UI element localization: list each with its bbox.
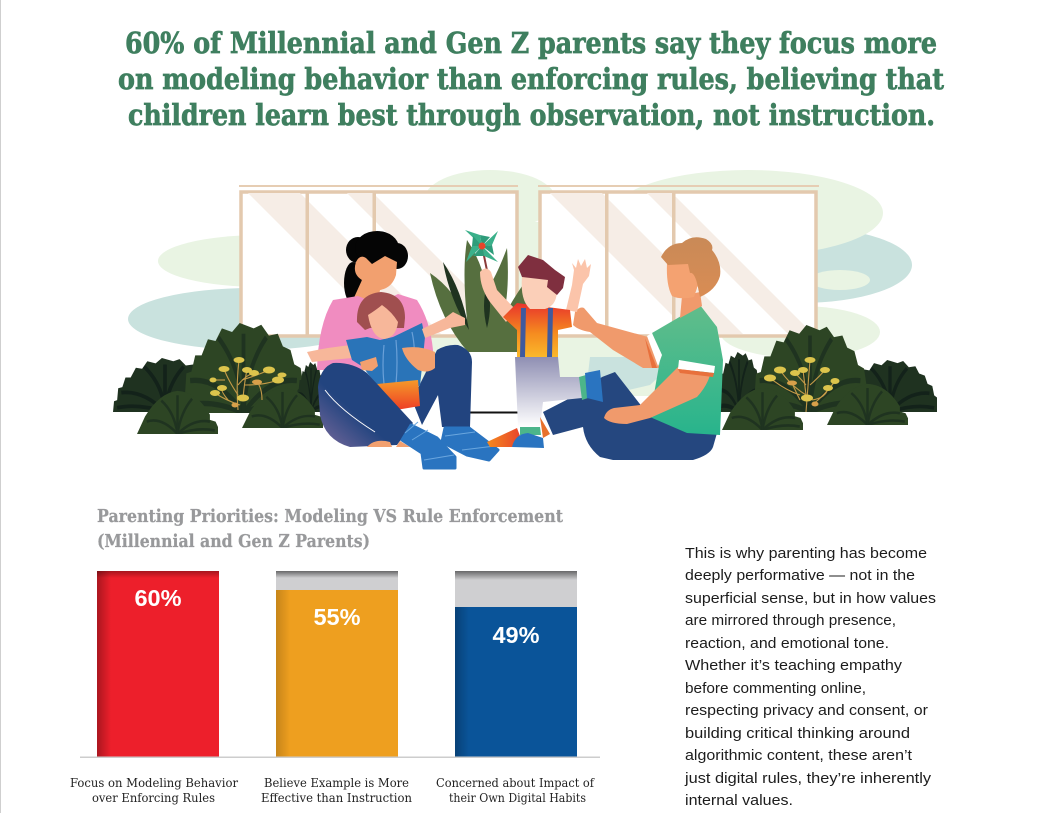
mother face and neck <box>352 256 397 302</box>
chart heading: Parenting Priorities: Modeling VS Rule Enforcement <box>97 506 564 527</box>
boy raised arms <box>480 268 516 322</box>
bar labels <box>70 776 595 805</box>
bar labels: their Own Digital Habits <box>449 791 586 805</box>
bar: 55% <box>276 571 398 757</box>
body text: Whether it’s teaching empathy <box>685 658 903 674</box>
mother top <box>317 294 433 370</box>
bar labels: Believe Example is More <box>264 776 409 790</box>
potted plant <box>430 240 528 414</box>
body text: deeply performative — not in the <box>685 568 915 584</box>
title: on modeling behavior than enforcing rules, believing that <box>118 62 945 96</box>
title: children learn best through observation, not instruction. <box>128 98 935 132</box>
man arm on knee <box>604 367 710 424</box>
boy hair <box>518 255 565 295</box>
pinwheel <box>465 230 498 295</box>
bushes right <box>715 325 937 430</box>
body text: building critical thinking around <box>685 726 910 742</box>
boy standing shoes <box>520 427 541 435</box>
chart heading: (Millennial and Gen Z Parents) <box>97 531 370 552</box>
child arm left <box>307 345 352 362</box>
body text: superficial sense, but in how values <box>685 591 936 607</box>
title <box>118 26 945 132</box>
bar: 55%: 55% <box>313 604 361 630</box>
boy pants <box>515 357 582 427</box>
figure: man <box>543 237 723 460</box>
child shorts <box>377 380 420 410</box>
boy raised shoe <box>579 375 588 400</box>
bar labels: Concerned about Impact of <box>436 776 595 790</box>
flowers left <box>210 357 286 410</box>
left window <box>239 185 520 340</box>
man reaching arm <box>573 308 660 368</box>
bar: 60% <box>97 571 219 757</box>
bar labels: Effective than Instruction <box>261 791 412 805</box>
background blobs <box>128 170 912 400</box>
child arm right <box>422 312 465 338</box>
bar: 49% <box>455 571 577 757</box>
body text: before commenting online, <box>685 681 866 697</box>
boy face <box>522 277 557 309</box>
bar chart <box>70 571 600 805</box>
illustration: family sitting by the windows <box>113 170 937 468</box>
figure: boy with pinwheel <box>465 230 603 448</box>
man shirt <box>650 305 723 435</box>
mother feet <box>367 441 410 447</box>
body text: just digital rules, they’re inherently <box>684 771 932 787</box>
body text: are mirrored through presence, <box>685 613 896 629</box>
bar labels: over Enforcing Rules <box>92 791 215 805</box>
mother near leg <box>318 363 413 447</box>
body text: respecting privacy and consent, or <box>685 703 928 719</box>
title: 60% of Millennial and Gen Z parents say they focus more <box>125 26 937 60</box>
flowers right <box>764 357 840 412</box>
body text: reaction, and emotional tone. <box>685 636 889 652</box>
bar labels: Focus on Modeling Behavior <box>70 776 238 790</box>
mother far leg <box>412 345 472 427</box>
boy shirt <box>503 303 572 357</box>
suspenders <box>520 308 553 357</box>
man trousers <box>543 372 717 460</box>
bushes left <box>113 323 326 434</box>
man sleeve band <box>678 360 715 373</box>
body text: This is why parenting has become <box>685 546 927 562</box>
body text <box>684 546 936 809</box>
man neck and face <box>680 292 702 318</box>
right window <box>538 185 819 340</box>
chart heading <box>97 506 564 552</box>
body text: algorithmic content, these aren’t <box>685 748 912 764</box>
child shirt <box>346 323 425 386</box>
bar: 60%: 60% <box>134 585 182 611</box>
body text: internal values. <box>685 793 793 809</box>
socks <box>402 425 455 468</box>
child hair <box>357 292 405 330</box>
mother hands <box>402 347 435 372</box>
child face <box>368 305 398 339</box>
man hair <box>661 237 720 297</box>
mother hair <box>344 231 408 304</box>
bar: 49%: 49% <box>492 622 540 648</box>
figure: mother with child <box>307 231 498 468</box>
